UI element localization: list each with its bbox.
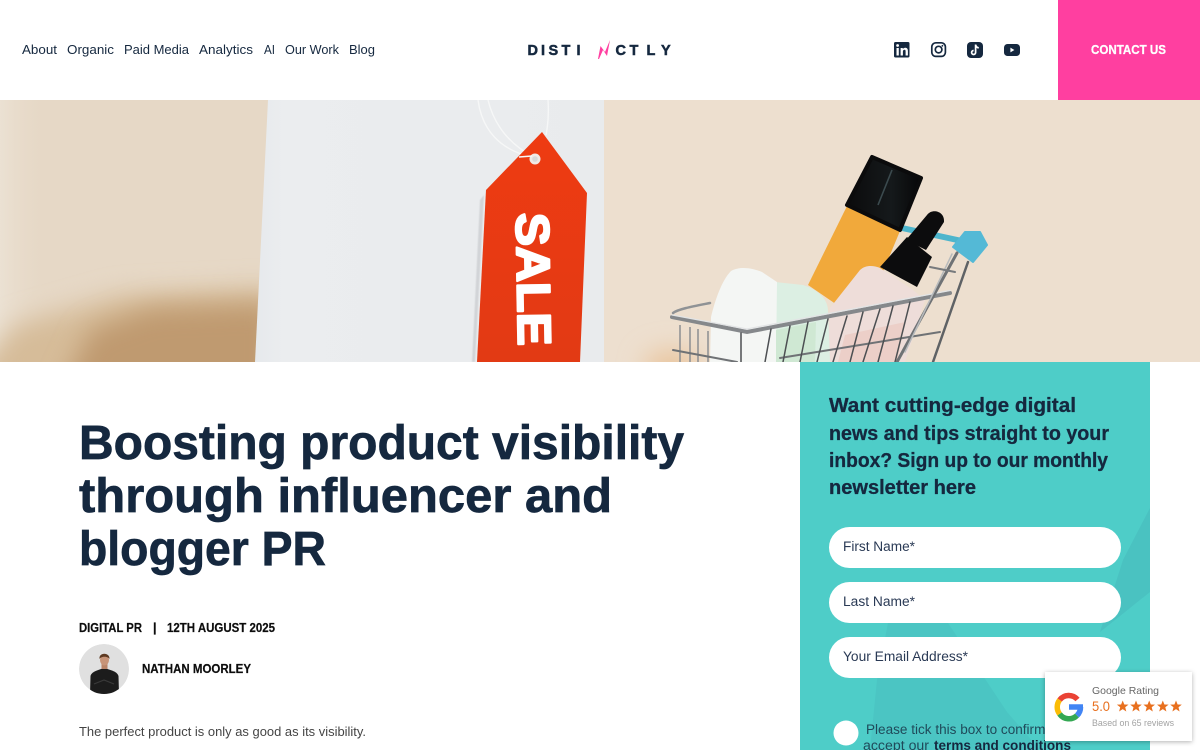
bag strings bbox=[478, 100, 548, 157]
logo: Distinctly: DISTI bbox=[528, 43, 581, 59]
input: first name bbox=[829, 527, 1121, 568]
hero photo: shopping bag with sale tag and mini trolley bbox=[0, 100, 1200, 362]
nav link: Our Work: Our Work bbox=[285, 42, 339, 57]
icon: LinkedIn bbox=[894, 42, 910, 58]
rating score: 5.0 bbox=[1092, 698, 1110, 714]
icon: Google G bbox=[1057, 695, 1083, 719]
navigation bar bbox=[0, 0, 1200, 100]
article title: through influencer and bbox=[79, 470, 612, 523]
nav link: About: About bbox=[22, 42, 57, 57]
article meta: category and date: 12TH AUGUST 2025 bbox=[167, 621, 275, 635]
shopping bag bbox=[255, 100, 604, 362]
author avatar bbox=[79, 644, 129, 694]
article meta: category and date: DIGITAL PR bbox=[79, 621, 142, 635]
nav link: Paid Media: Paid Media bbox=[124, 42, 190, 57]
input: first name: First Name* bbox=[843, 539, 916, 554]
author name: NATHAN MOORLEY bbox=[142, 662, 252, 676]
newsletter heading: news and tips straight to your bbox=[829, 423, 1109, 445]
logo: Distinctly: CTLY bbox=[616, 43, 671, 59]
icon: Instagram bbox=[932, 43, 945, 56]
input: last name bbox=[829, 582, 1121, 623]
logo: Distinctly bbox=[528, 40, 671, 59]
button: contact us bbox=[1058, 0, 1200, 100]
newsletter heading: Want cutting-edge digital bbox=[829, 395, 1076, 417]
checkbox bbox=[834, 720, 858, 746]
newsletter heading bbox=[829, 395, 1109, 499]
nav link: AI: AI bbox=[264, 42, 275, 57]
five stars bbox=[1117, 700, 1182, 712]
article meta: category and date: | bbox=[153, 621, 156, 635]
nav link: Analytics: Analytics bbox=[199, 42, 254, 57]
button: contact us: CONTACT US bbox=[1091, 43, 1166, 57]
input: email address bbox=[829, 637, 1121, 678]
article title: Boosting product visibility bbox=[79, 417, 684, 470]
input: email address: Your Email Address* bbox=[843, 649, 969, 664]
icon: TikTok bbox=[967, 42, 983, 58]
trolley back wires bbox=[680, 325, 708, 362]
white tub lid and mint tub bbox=[710, 268, 830, 362]
consent text: Please tick this box to confirm you bbox=[866, 722, 1071, 737]
nav link: Organic: Organic bbox=[67, 42, 115, 57]
intro paragraph: The perfect product is only as good as its visibility. bbox=[79, 724, 366, 739]
review count: Based on 65 reviews bbox=[1092, 718, 1174, 728]
article meta: category and date bbox=[79, 621, 275, 635]
input: last name: Last Name* bbox=[843, 594, 916, 609]
consent text bbox=[863, 722, 1071, 750]
sale tag: SALE bbox=[506, 212, 561, 346]
newsletter heading: inbox? Sign up to our monthly bbox=[829, 450, 1109, 472]
sale tag bbox=[472, 132, 587, 362]
article title: blogger PR bbox=[79, 523, 326, 576]
nav link: Blog: Blog bbox=[349, 42, 375, 57]
pink jar bbox=[826, 266, 925, 362]
trolley front wire basket bbox=[672, 253, 968, 362]
teal trolley handle bbox=[902, 228, 987, 262]
black dropper bbox=[880, 211, 944, 287]
icon: YouTube bbox=[1004, 44, 1020, 56]
panel: newsletter sign-up bbox=[800, 362, 1150, 750]
orange bottle with black cap bbox=[808, 157, 921, 322]
newsletter heading: newsletter here bbox=[829, 477, 976, 499]
rating label: Google Rating bbox=[1092, 685, 1159, 697]
article title bbox=[79, 417, 684, 576]
badge: Google rating bbox=[1045, 672, 1192, 741]
